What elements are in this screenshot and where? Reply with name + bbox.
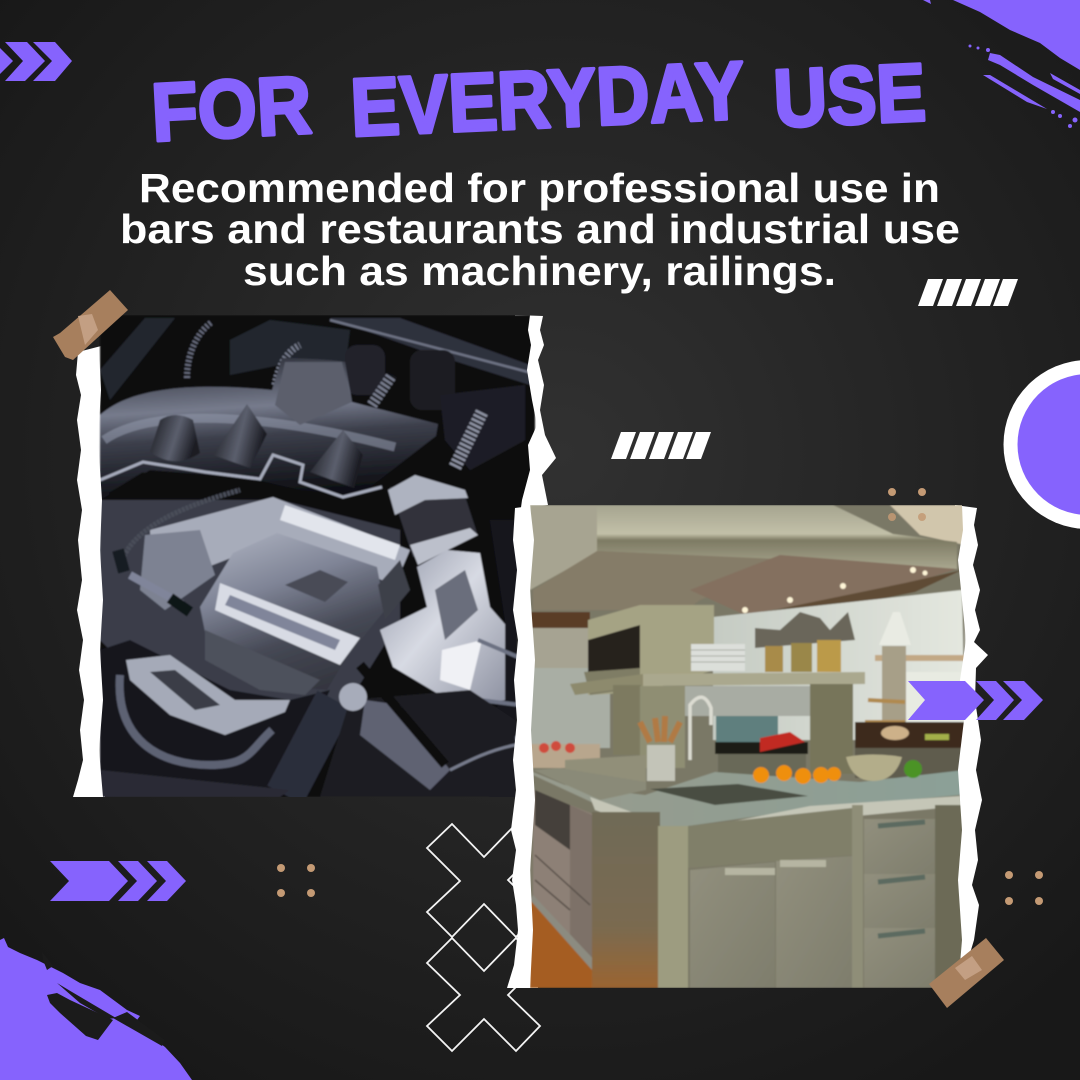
tape: engine xyxy=(53,290,128,360)
centre cylinder xyxy=(200,533,385,690)
top rails xyxy=(100,318,175,400)
title: USE xyxy=(772,47,928,145)
ribbed cap xyxy=(275,362,352,425)
subtitle xyxy=(120,165,960,294)
kitchen picture xyxy=(530,505,965,988)
circle badge xyxy=(1004,360,1080,529)
right drawers xyxy=(864,819,935,875)
upper band xyxy=(692,808,853,830)
brush corner: bottom left xyxy=(0,938,192,1080)
hose clamp xyxy=(390,487,477,557)
photo: engine xyxy=(53,290,556,800)
countertop xyxy=(533,770,965,830)
brush corner: top right xyxy=(923,0,1080,128)
bowl and pepper xyxy=(846,754,902,781)
oranges xyxy=(753,765,841,784)
utensils xyxy=(755,612,855,648)
torn paper: engine right xyxy=(510,315,556,512)
plates xyxy=(691,644,745,671)
back wall xyxy=(713,590,965,740)
hood underside xyxy=(534,550,769,610)
title xyxy=(149,45,928,159)
arrow on kitchen photo xyxy=(908,681,984,720)
doors xyxy=(690,862,775,988)
subtitle: such as machinery, railings. xyxy=(243,248,836,294)
bracket xyxy=(378,560,411,610)
stripes: centre xyxy=(611,432,711,459)
outlined crosses xyxy=(427,824,540,1051)
torn paper: kitchen right xyxy=(955,505,988,965)
stripes: top right xyxy=(918,279,1018,306)
tape: kitchen xyxy=(929,938,1004,1008)
braided hose and connector xyxy=(122,490,240,560)
brass pot filler xyxy=(865,700,905,722)
prep block xyxy=(565,755,646,785)
torn paper: engine left xyxy=(73,345,105,797)
subtitle: Recommended for professional use in xyxy=(139,165,940,211)
dots: right xyxy=(1005,871,1043,905)
silver elbow xyxy=(380,550,510,707)
back counter xyxy=(855,722,965,748)
intake manifold xyxy=(100,358,438,500)
title: EVERYDAY xyxy=(349,45,746,154)
right side ridges xyxy=(490,520,517,722)
chevrons: top left xyxy=(0,42,72,81)
floor xyxy=(530,901,593,988)
torn paper: kitchen left xyxy=(507,505,538,988)
cones xyxy=(150,415,200,461)
left back xyxy=(530,612,590,628)
faucet xyxy=(690,697,711,760)
gasket line xyxy=(100,455,382,497)
chevrons: lower left xyxy=(50,861,186,901)
subtitle: bars and restaurants and industrial use xyxy=(120,206,960,252)
engine picture xyxy=(100,315,535,800)
faint dots on kitchen photo xyxy=(888,513,926,521)
dots: upper right xyxy=(888,488,926,496)
column xyxy=(658,826,688,988)
pendant lamp xyxy=(879,612,911,645)
salamander xyxy=(588,605,714,695)
lower area xyxy=(100,640,330,797)
side drawers xyxy=(533,790,592,933)
end panel xyxy=(592,812,660,988)
shelf xyxy=(643,672,865,686)
dots: lower left xyxy=(277,864,315,897)
photo: kitchen xyxy=(507,505,1004,1008)
lower-left foil xyxy=(100,498,402,702)
title: FOR xyxy=(149,60,314,159)
ceiling xyxy=(890,505,965,545)
chevrons: right xyxy=(976,681,1043,720)
